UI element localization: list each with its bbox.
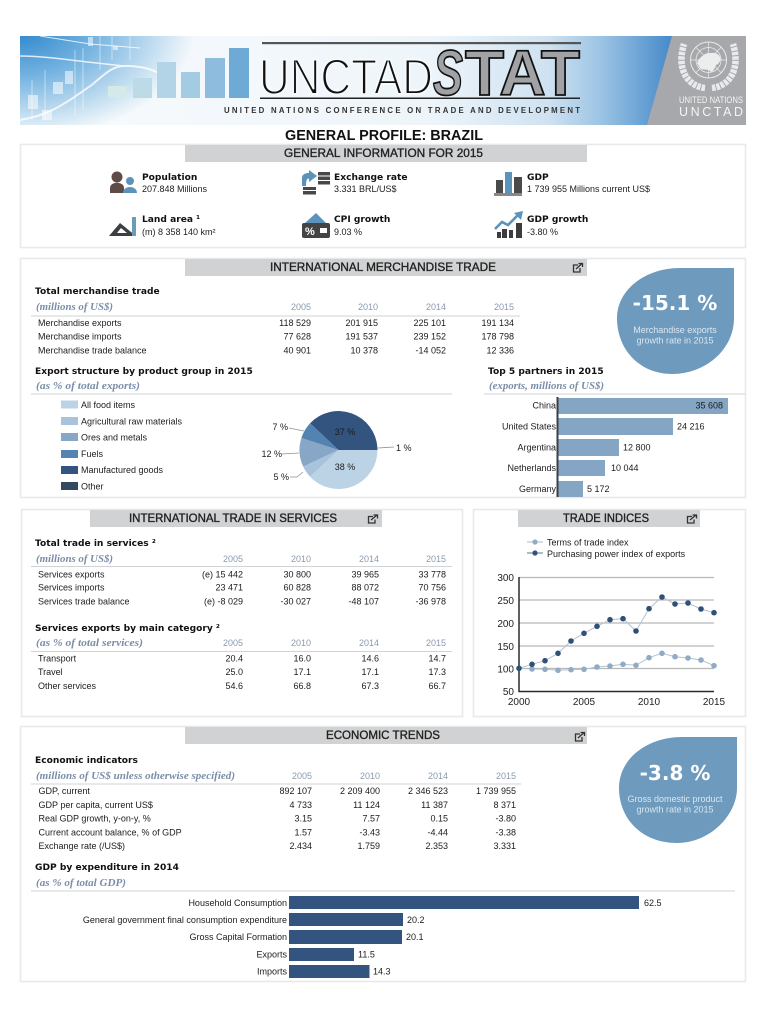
table: total merchandise trade: 2015: [494, 302, 514, 312]
heading: export structure: [31, 367, 452, 394]
bar chart: GDP by expenditure: Gross Capital Formation: [189, 932, 287, 942]
table: total merchandise trade: 118 529: [279, 318, 311, 328]
line chart: trade indices: 2005: [573, 697, 596, 708]
table: services exports by category: 14.6: [361, 654, 379, 664]
legend: product groups: Agricultural raw materials: [81, 416, 183, 426]
line chart: trade indices: 2000: [508, 697, 531, 708]
table: services exports by category: Other services: [38, 681, 97, 691]
table: total merchandise trade: 12 336: [486, 346, 514, 356]
legend: product groups: Ores and metals: [81, 432, 148, 442]
legend: product groups: All food items: [81, 400, 136, 410]
pie chart: export structure: 7 %: [272, 422, 288, 432]
bar chart: GDP by expenditure: Household Consumption: [188, 898, 287, 908]
table: total trade in services: 70 756: [418, 582, 446, 592]
table: economic indicators: 2005: [292, 771, 312, 781]
table: total merchandise trade: 225 101: [413, 318, 446, 328]
stat: land area: (m) 8 358 140 km²: [142, 227, 216, 237]
stat: population: 207.848 Millions: [142, 184, 208, 194]
bar chart: top 5 partners: United States: [502, 422, 556, 432]
line chart: trade indices: 250: [497, 596, 514, 607]
heading bar: economic trends: ECONOMIC TRENDS: [326, 728, 440, 742]
bar chart: top 5 partners: Germany: [519, 484, 556, 494]
legend: product groups: Fuels: [81, 449, 104, 459]
table: total merchandise trade: 2010: [358, 302, 378, 312]
stat: land area: Land area ¹: [142, 215, 200, 225]
callout: merchandise exports growth: growth rate in 2015: [636, 336, 714, 346]
table: total trade in services: 2014: [359, 554, 379, 564]
heading bar: general information: GENERAL INFORMATION FOR 2015: [284, 146, 483, 160]
table: economic indicators: 2010: [360, 771, 380, 781]
table: economic indicators: 2 346 523: [408, 786, 448, 796]
table: economic indicators: Exchange rate (/US$): [38, 841, 125, 851]
heading bar: economic trends: [185, 727, 587, 744]
heading bar: trade indices: TRADE INDICES: [563, 511, 649, 525]
legend: product groups: Manufactured goods: [81, 465, 164, 475]
UNCTADSTAT logo: [259, 37, 581, 109]
stat: GDP growth: [495, 211, 588, 238]
table: total trade in services: 33 778: [418, 570, 446, 580]
stat: CPI growth: %: [305, 226, 315, 238]
bar chart: GDP by expenditure: 62.5: [644, 898, 662, 908]
table: services exports by category: 2005: [223, 638, 243, 648]
table: total trade in services: 23 471: [215, 582, 243, 592]
table: economic indicators: 7.57: [362, 814, 380, 824]
bar chart: top 5 partners: Netherlands: [507, 463, 556, 473]
UNCTADSTAT logo: S: [433, 37, 463, 109]
table: economic indicators: 0.15: [430, 814, 448, 824]
icon: external link: [576, 732, 584, 741]
table: total trade in services: 2015: [426, 554, 446, 564]
icon: external link: [574, 264, 582, 272]
header banner: [20, 36, 746, 125]
table: economic indicators: 11 124: [353, 800, 380, 810]
bar chart: GDP by expenditure: 11.5: [358, 950, 375, 960]
stat: GDP: 1 739 955 Millions current US$: [527, 184, 650, 194]
table: economic indicators: Current account balance, % of GDP: [38, 828, 182, 838]
stat: population: [110, 172, 208, 194]
table: services exports by category: 14.7: [428, 654, 446, 664]
callout: merchandise exports growth: [617, 268, 734, 374]
table: total trade in services: -48 107: [348, 596, 379, 606]
bar chart: GDP by expenditure: Imports: [257, 966, 287, 976]
stat: exchange rate: [302, 170, 408, 194]
table: total trade in services: 30 800: [283, 570, 311, 580]
table: economic indicators: 11 387: [421, 800, 448, 810]
callout: GDP growth rate: growth rate in 2015: [636, 804, 714, 814]
UNCTAD name: UNCTAD: [679, 105, 743, 119]
bar chart: top 5 partners: 12 800: [623, 442, 651, 452]
UN grey block: [647, 36, 746, 125]
bar chart: top 5 partners: [484, 367, 745, 497]
bar chart: GDP by expenditure: 14.3: [373, 966, 391, 976]
stat: population: Population: [142, 173, 197, 183]
table: total merchandise trade: [31, 287, 520, 356]
legend: product groups: Other: [81, 482, 104, 492]
table: economic indicators: -4.44: [427, 828, 448, 838]
table: total trade in services: (millions of US$): [36, 553, 113, 565]
bar chart: GDP by expenditure: 20.1: [406, 932, 424, 942]
table: services exports by category: 25.0: [225, 667, 243, 677]
table: total merchandise trade: 239 152: [413, 332, 446, 342]
panel: trade indices: [474, 510, 746, 716]
table: services exports by category: 2015: [426, 638, 446, 648]
chart legend: Purchasing power index of exports: [547, 549, 686, 559]
pie chart: export structure: 12 %: [261, 449, 282, 459]
UN name: UNITED NATIONS: [679, 95, 743, 105]
pie chart: export structure: 1 %: [396, 443, 412, 453]
line chart: trade indices: [497, 573, 726, 708]
table: total trade in services: 88 072: [351, 582, 379, 592]
table: economic indicators: 2 209 400: [340, 786, 380, 796]
chart legend: Terms of trade index: [547, 538, 629, 548]
stat: CPI growth: CPI growth: [334, 215, 390, 225]
table: total merchandise trade: Merchandise imports: [38, 332, 122, 342]
table: economic indicators: -3.38: [495, 828, 516, 838]
table: total trade in services: Total trade in services ²: [35, 539, 156, 549]
table: economic indicators: Real GDP growth, y-on-y, %: [38, 814, 151, 824]
table: services exports by category: Transport: [38, 654, 77, 664]
faint background chart: [20, 36, 165, 120]
table: economic indicators: 2.353: [425, 841, 448, 851]
table: economic indicators: 4 733: [289, 800, 312, 810]
table: total trade in services: Services imports: [38, 582, 105, 592]
UNCTADSTAT logo: TAT: [465, 37, 580, 109]
callout: GDP growth rate: [619, 737, 737, 843]
bar chart: top 5 partners: 5 172: [587, 484, 610, 494]
table: total merchandise trade: 178 798: [481, 332, 514, 342]
table: total trade in services: Services exports: [38, 570, 105, 580]
table: services exports by category: 17.1: [293, 667, 311, 677]
callout: merchandise exports growth: -15.1 %: [633, 291, 717, 315]
table: economic indicators: 3.331: [493, 841, 516, 851]
bar chart: GDP by expenditure: [31, 863, 735, 978]
bar chart: GDP by expenditure: (as % of total GDP): [36, 877, 126, 889]
bar chart: top 5 partners: 10 044: [611, 463, 639, 473]
table: economic indicators: 2014: [428, 771, 448, 781]
stat: GDP growth: -3.80 %: [527, 227, 558, 237]
table: services exports by category: 17.1: [361, 667, 379, 677]
table: services exports by category: 66.7: [428, 681, 446, 691]
bar chart: GDP by expenditure: Exports: [256, 950, 287, 960]
line chart: trade indices: 300: [497, 573, 514, 584]
table: economic indicators: 1.57: [294, 828, 312, 838]
banner bar chart: [108, 48, 249, 98]
bar chart: GDP by expenditure: 20.2: [407, 915, 425, 925]
table: economic indicators: 1.759: [357, 841, 380, 851]
stat: CPI growth: 9.03 %: [334, 227, 362, 237]
stat: GDP: [494, 172, 650, 196]
stat: CPI growth: [302, 213, 390, 238]
heading: export structure: (as % of total exports): [36, 380, 140, 392]
table: economic indicators: 892 107: [279, 786, 312, 796]
table: total trade in services: [31, 539, 452, 606]
table: total merchandise trade: 191 134: [481, 318, 514, 328]
bar chart: top 5 partners: 35 608: [695, 400, 723, 410]
table: total trade in services: -36 978: [415, 596, 446, 606]
pie chart: export structure: [261, 411, 412, 489]
table: total merchandise trade: -14 052: [415, 346, 446, 356]
table: services exports by category: 20.4: [225, 654, 243, 664]
stat: exchange rate: Exchange rate: [334, 173, 408, 183]
legend: product groups: [61, 400, 183, 492]
table: economic indicators: 3.15: [294, 814, 312, 824]
table: services exports by category: 66.8: [293, 681, 311, 691]
table: total trade in services: 60 828: [283, 582, 311, 592]
table: total merchandise trade: 40 901: [283, 346, 311, 356]
table: services exports by category: 54.6: [225, 681, 243, 691]
panel: international merchandise trade: [20, 258, 746, 498]
bar chart: top 5 partners: China: [532, 400, 556, 410]
table: total merchandise trade: 2014: [426, 302, 446, 312]
table: total merchandise trade: Merchandise trade balance: [38, 346, 147, 356]
table: economic indicators: 2.434: [289, 841, 312, 851]
table: total merchandise trade: 2005: [291, 302, 311, 312]
pie chart: export structure: 5 %: [273, 472, 289, 482]
line chart: trade indices: 2015: [703, 697, 726, 708]
table: economic indicators: GDP, current: [38, 786, 90, 796]
bar chart: top 5 partners: 24 216: [677, 422, 705, 432]
line chart: trade indices: 150: [497, 642, 514, 653]
stat: GDP growth: GDP growth: [527, 215, 588, 225]
table: total merchandise trade: Total merchandise trade: [35, 287, 160, 297]
table: total merchandise trade: 191 537: [345, 332, 378, 342]
table: economic indicators: [31, 756, 521, 851]
line chart: trade indices: 2010: [638, 697, 661, 708]
table: services exports by category: 16.0: [293, 654, 311, 664]
icon: external link: [688, 515, 696, 523]
bar chart: top 5 partners: (exports, millions of US$): [489, 380, 604, 392]
table: economic indicators: -3.80: [495, 814, 516, 824]
table: total trade in services: (e) -8 029: [204, 596, 243, 606]
callout: GDP growth rate: -3.8 %: [640, 761, 710, 785]
table: services exports by category: Travel: [38, 667, 63, 677]
table: services exports by category: 17.3: [428, 667, 446, 677]
table: economic indicators: 1 739 955: [476, 786, 516, 796]
stat: land area: [109, 215, 216, 237]
line chart: trade indices: 200: [497, 619, 514, 630]
pie chart: export structure: 38 %: [335, 462, 355, 472]
table: services exports by category: 67.3: [361, 681, 379, 691]
bar chart: top 5 partners: Argentina: [517, 442, 556, 452]
table: economic indicators: (millions of US$ unless otherwise specified): [36, 770, 235, 782]
heading bar: trade indices: [518, 510, 700, 527]
panel: general information: [20, 144, 746, 248]
table: total trade in services: Services trade balance: [38, 596, 130, 606]
panel: international trade in services: [22, 510, 462, 716]
table: total merchandise trade: (millions of US$): [36, 301, 113, 313]
heading bar: merchandise trade: [185, 259, 587, 276]
bar chart: GDP by expenditure: GDP by expenditure in 2014: [35, 863, 179, 873]
table: services exports by category: 2014: [359, 638, 379, 648]
table: economic indicators: -3.43: [359, 828, 380, 838]
bar chart: GDP by expenditure: General government final consumption expenditure: [83, 915, 287, 925]
table: total merchandise trade: 77 628: [283, 332, 311, 342]
table: total trade in services: -30 027: [280, 596, 311, 606]
table: total trade in services: 2005: [223, 554, 243, 564]
line chart: trade indices: 100: [497, 664, 514, 676]
callout: GDP growth rate: Gross domestic product: [627, 794, 723, 804]
pie chart: export structure: 37 %: [335, 427, 355, 437]
panel: economic trends: [20, 726, 746, 982]
callout: merchandise exports growth: Merchandise exports: [633, 325, 717, 335]
heading bar: services: INTERNATIONAL TRADE IN SERVICES: [129, 511, 337, 525]
UN emblem: [681, 42, 736, 88]
table: total trade in services: (e) 15 442: [202, 570, 243, 580]
stat: exchange rate: 3.331 BRL/US$: [334, 184, 397, 194]
UNCTADSTAT logo: UNCTAD: [259, 49, 433, 105]
table: services exports by category: (as % of total services): [36, 637, 143, 649]
table: total merchandise trade: 201 915: [345, 318, 378, 328]
table: services exports by category: Services exports by main category ²: [35, 624, 220, 634]
banner tagline: UNITED NATIONS CONFERENCE ON TRADE AND DEVELOPMENT: [224, 106, 580, 115]
main title: GENERAL PROFILE: BRAZIL: [285, 127, 483, 144]
line chart: trade indices: 50: [503, 687, 514, 698]
stat: GDP: GDP: [527, 173, 549, 183]
table: services exports by category: 2010: [291, 638, 311, 648]
table: economic indicators: Economic indicators: [35, 756, 138, 766]
heading bar: merchandise trade: INTERNATIONAL MERCHANDISE TRADE: [270, 260, 496, 274]
heading bar: general information: [185, 145, 587, 162]
table: economic indicators: GDP per capita, current US$: [38, 800, 153, 810]
table: total trade in services: 39 965: [351, 570, 379, 580]
table: total merchandise trade: Merchandise exports: [38, 318, 122, 328]
table: economic indicators: 8 371: [493, 800, 516, 810]
bar chart: top 5 partners: Top 5 partners in 2015: [488, 367, 604, 377]
table: economic indicators: 2015: [496, 771, 516, 781]
table: total trade in services: 2010: [291, 554, 311, 564]
heading: export structure: Export structure by product group in 2015: [35, 367, 253, 377]
table: total merchandise trade: 10 378: [350, 346, 378, 356]
chart legend: [527, 538, 686, 559]
table: services exports by category: [31, 624, 452, 691]
icon: external link: [368, 515, 378, 523]
heading bar: services: [90, 510, 382, 527]
